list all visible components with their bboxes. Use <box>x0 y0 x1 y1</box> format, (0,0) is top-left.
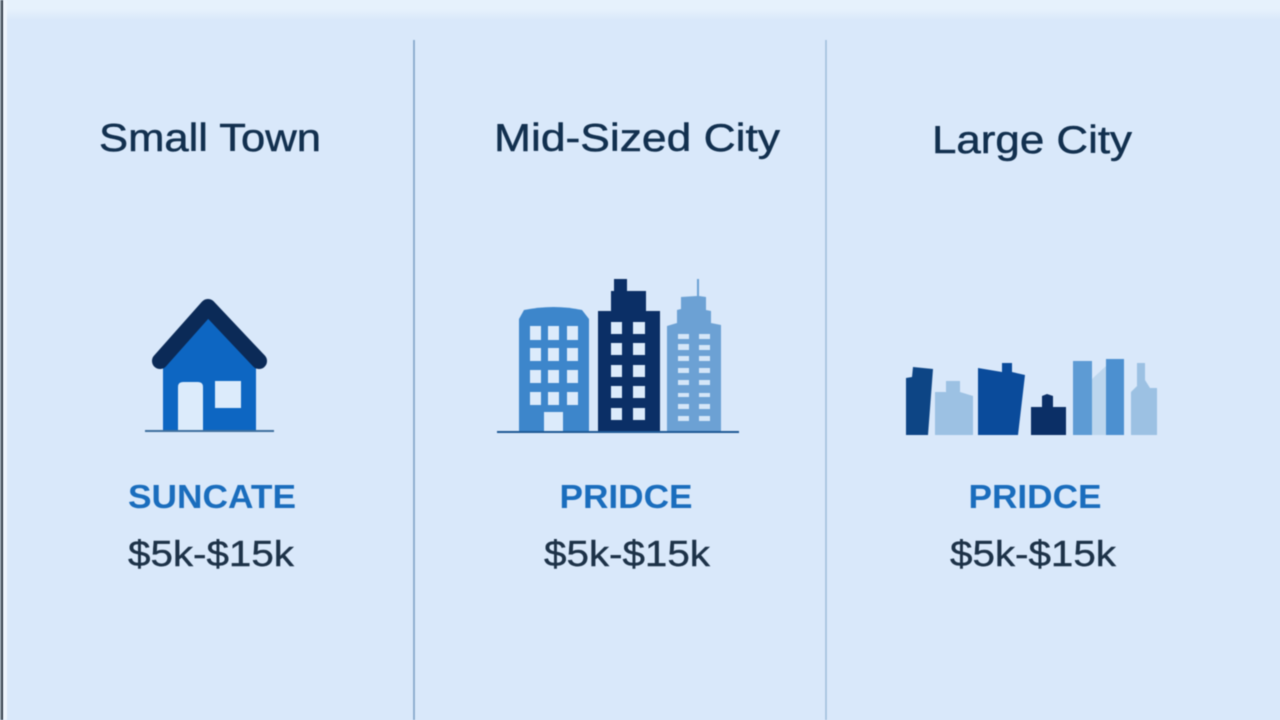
price: mid-sized city: $5k-$15k <box>544 533 711 574</box>
building: right light blue <box>667 279 721 431</box>
price: small town: $5k-$15k <box>128 533 295 574</box>
panel: large city <box>906 119 1157 574</box>
label: PRIDCE (mid-sized): PRIDCE <box>560 478 692 515</box>
label: PRIDCE (large): PRIDCE <box>968 478 1102 515</box>
heading: Large City: Large City <box>932 119 1133 162</box>
heading: Mid-Sized City: Mid-Sized City <box>494 117 781 160</box>
icon: large city skyline <box>906 359 1157 435</box>
panel: mid-sized city <box>494 117 781 574</box>
heading: Small Town: Small Town <box>99 117 321 160</box>
label: SUNCATE: SUNCATE <box>128 478 296 515</box>
price: large city: $5k-$15k <box>950 533 1117 574</box>
icon: mid-sized city buildings <box>497 279 739 433</box>
building: left blue <box>519 307 589 431</box>
panel: small town <box>99 117 321 574</box>
building: centre navy <box>598 279 660 431</box>
icon: house <box>145 307 274 432</box>
